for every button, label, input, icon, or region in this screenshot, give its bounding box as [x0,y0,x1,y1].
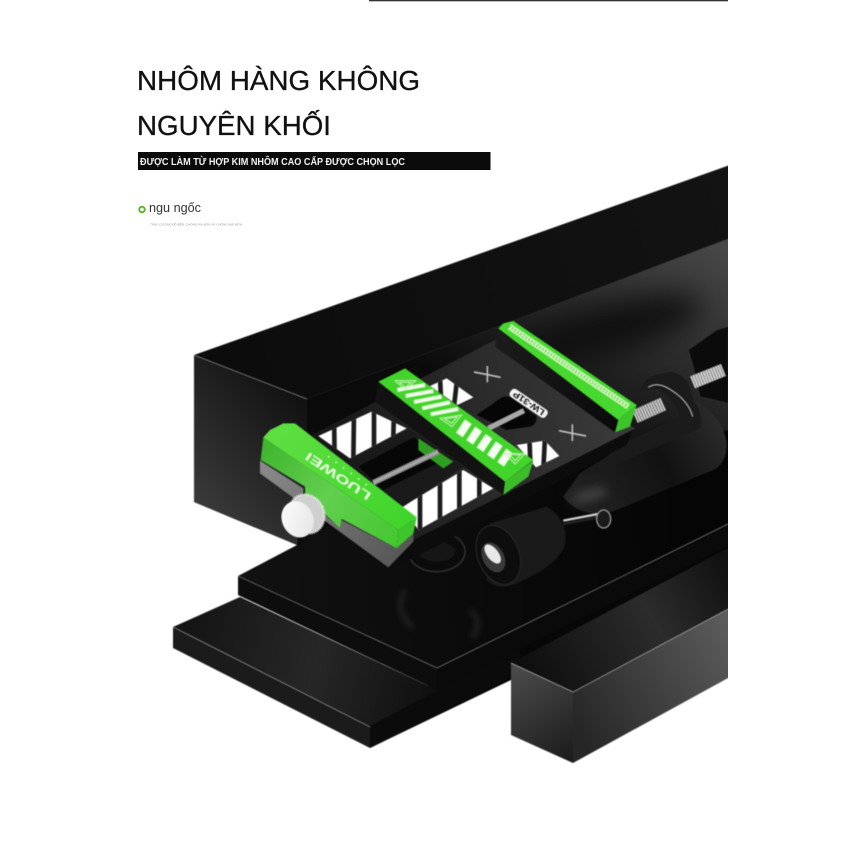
jaw bars [456,419,513,467]
product scene [173,165,730,763]
title [137,65,420,141]
vise base plate [312,338,635,542]
jaw triangles [395,381,525,464]
icon: green ring with caption [139,201,242,226]
roller under the vise [408,507,565,591]
jaw dots [327,455,368,486]
threaded screw far [693,370,723,382]
alignment cross 1 [474,366,501,382]
title: NGUYÊN KHỐI [137,109,331,141]
stacked plates [173,430,730,748]
centre channel with rod [358,436,462,508]
big black block [194,165,730,560]
front jaw grey base [260,461,413,567]
title: NHÔM HÀNG KHÔNG [137,65,420,96]
upper slot with rod [477,397,537,430]
front jaw [260,423,417,567]
C-clamp and screw [563,327,728,528]
icon: green ring with caption: TĂNG CƯỜNG ĐỘ BỀN, CHỐNG ĂN MÒN VÀ CHỐNG MÀI MÒN [150,222,242,226]
hatch panel upper left [318,410,407,463]
clamp body [564,422,727,514]
roller cylinder [487,507,565,587]
pin [563,510,611,528]
subtitle bar [138,152,490,170]
square bar [511,547,730,763]
back jaw [495,321,637,432]
clamp knob [688,327,728,403]
top edge strip [369,0,728,1]
hatch panel lower right [516,440,560,468]
thumb screw [280,492,326,538]
hatch panel lower [403,467,493,533]
subtitle bar: ĐƯỢC LÀM TỪ HỢP KIM NHÔM CAO CẤP ĐƯỢC CHỌN LỌC [140,156,405,168]
jaw stripes [397,385,458,414]
model label pill [508,387,549,419]
vise [260,321,637,567]
logo text on jaw: LUOWEI [303,449,374,503]
clamp bracket [644,372,700,448]
roller highlight [481,542,506,573]
threaded screw near [635,404,663,417]
alignment cross 2 [559,424,586,441]
middle jaw [375,368,533,495]
hatch panel upper right [430,377,473,407]
icon: green ring with caption: ngu ngốc [149,201,201,215]
model label text: LW-31P [511,389,546,418]
